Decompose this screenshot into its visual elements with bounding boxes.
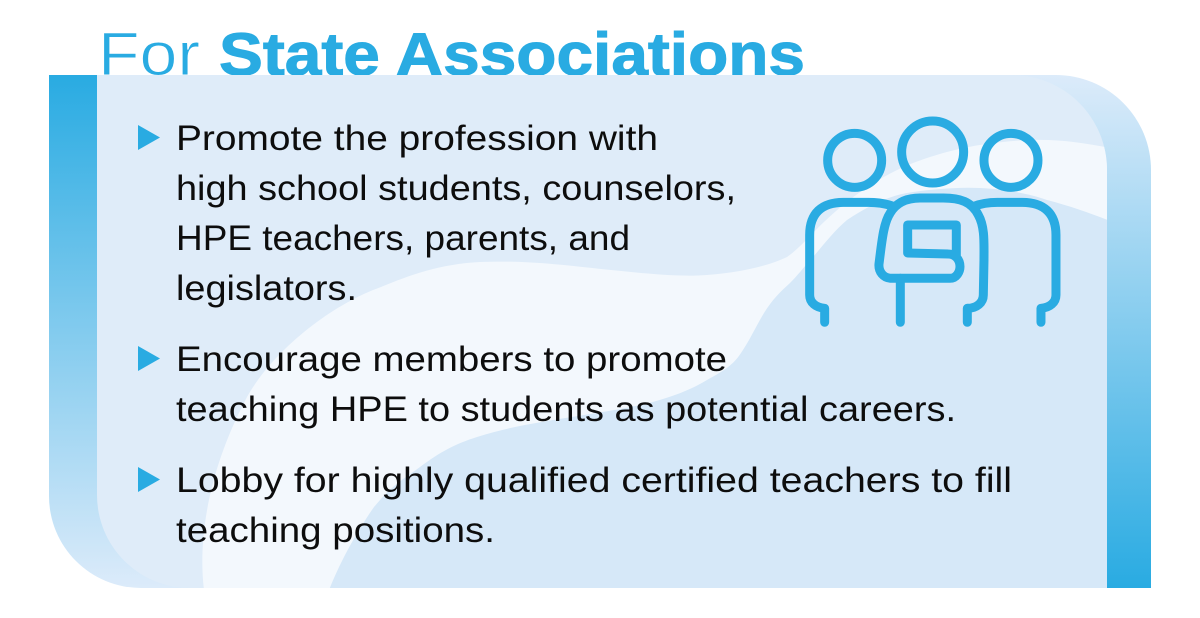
bullet text: Lobby for highly qualified certified teachers to fill — [176, 461, 1012, 500]
bullet: encourage members — [138, 340, 956, 429]
bullet arrow — [138, 125, 160, 150]
bullet: lobby — [138, 461, 1012, 550]
bullet text: high school students, counselors, — [176, 169, 736, 208]
title: For — [98, 20, 200, 88]
left gradient band — [49, 75, 300, 588]
right gradient band — [900, 75, 1151, 588]
bullet text: legislators. — [176, 269, 357, 308]
bullet arrow — [138, 467, 160, 492]
bullet text — [176, 340, 956, 429]
bullet text — [176, 461, 1012, 550]
panel: background card — [49, 75, 1151, 590]
bullet: promote the profession — [138, 119, 736, 308]
bullet text: teaching HPE to students as potential careers. — [176, 390, 956, 429]
icon: three people with tablet — [810, 121, 1056, 322]
bullet text: teaching positions. — [176, 511, 495, 550]
title: State Associations — [219, 21, 805, 88]
light wave band — [202, 140, 1110, 590]
bullet text: HPE teachers, parents, and — [176, 219, 630, 258]
inner panel — [97, 75, 1107, 588]
bullet arrow — [138, 346, 160, 371]
darker wave — [329, 188, 1110, 590]
bullet text: Encourage members to promote — [176, 340, 727, 379]
bullet text: Promote the profession with — [176, 119, 658, 158]
bullet text — [176, 119, 736, 308]
